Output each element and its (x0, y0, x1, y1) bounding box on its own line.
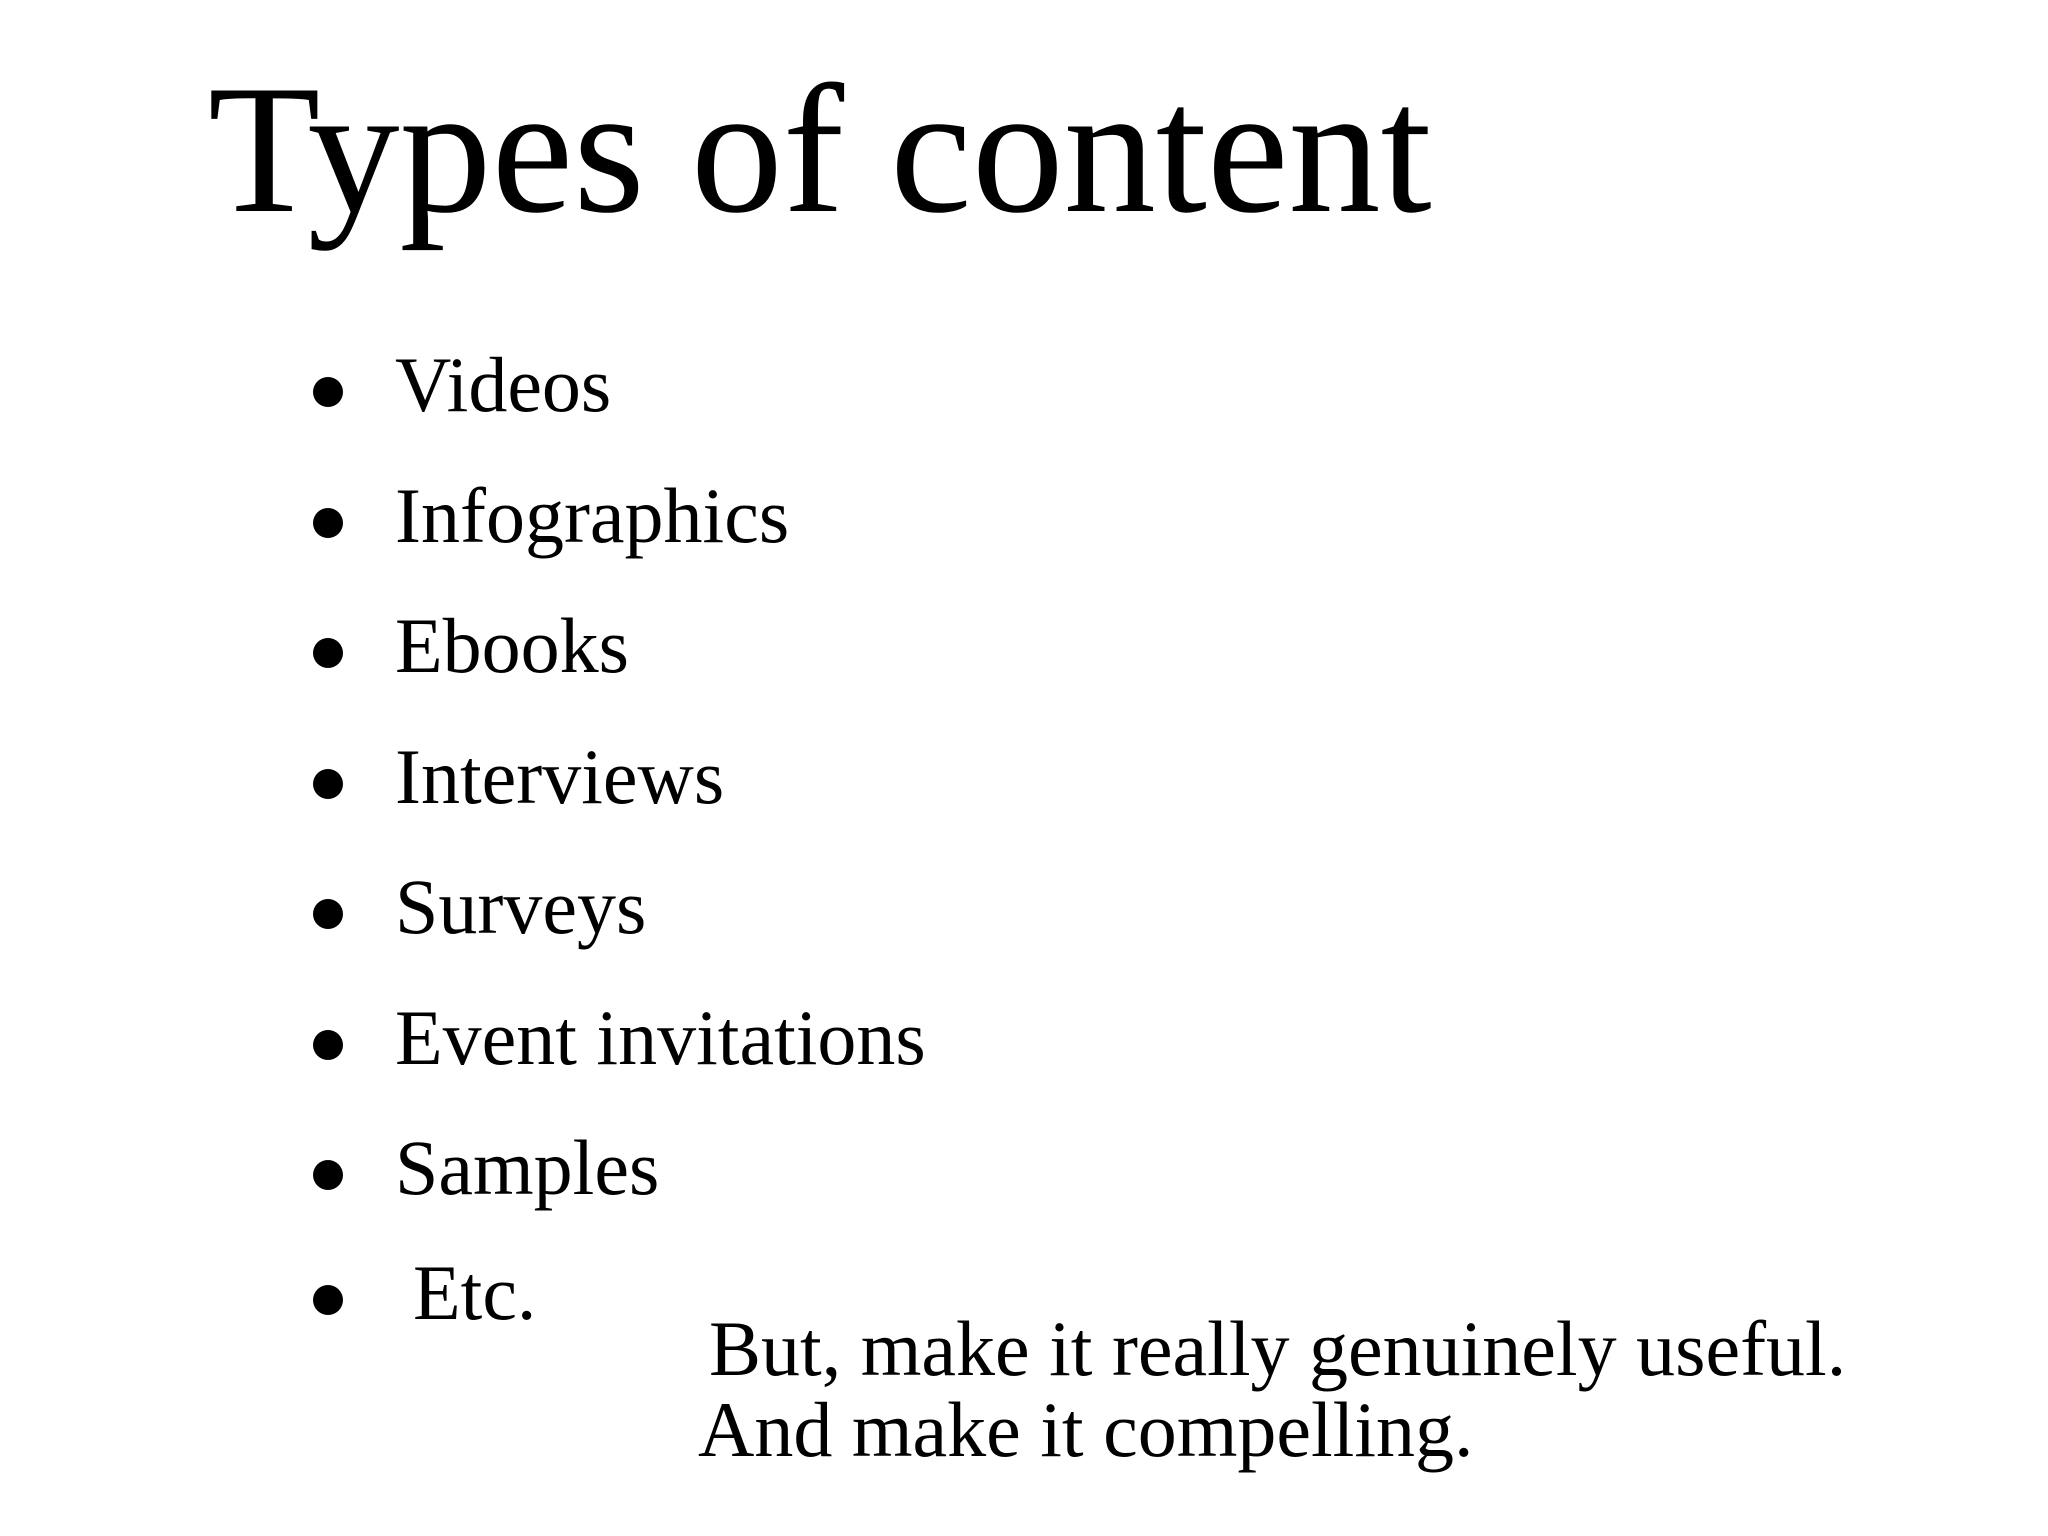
bullet: Event invitations: Event invitations (395, 994, 926, 1081)
bullet: Interviews: Interviews (395, 733, 724, 820)
bullet: Surveys: Surveys (395, 863, 646, 950)
text: compelling line: And make it compelling. (698, 1386, 1474, 1473)
bullet: Etc. (313, 1249, 536, 1336)
bullet: Ebooks: Ebooks (395, 602, 629, 689)
bullet: Samples: Samples (395, 1124, 659, 1211)
text: useful line: But, make it really genuinely useful. (709, 1305, 1846, 1392)
title: Types of content (208, 47, 1432, 251)
closing note (698, 1305, 1846, 1473)
bullet: Infographics: Infographics (395, 472, 789, 559)
bullet: Etc.: Etc. (413, 1249, 536, 1336)
bullet: Videos: Videos (395, 341, 611, 428)
bullet list (313, 341, 926, 1336)
